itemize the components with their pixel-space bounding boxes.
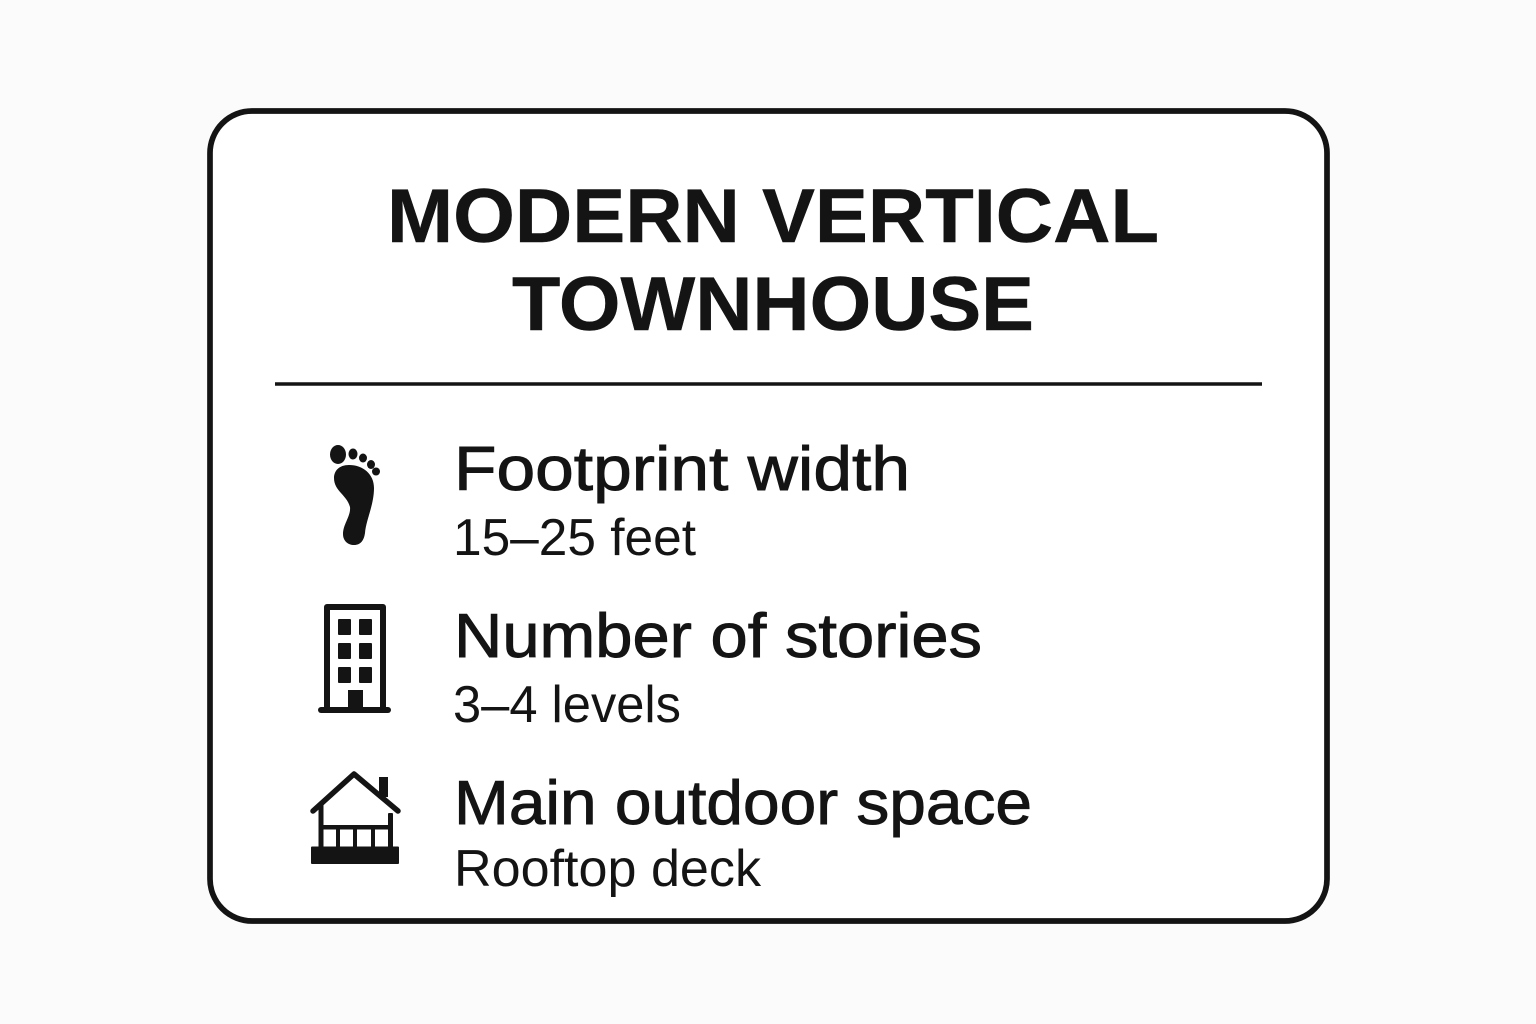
icon: footprint [330,445,380,545]
icon: house with rooftop deck [311,774,399,864]
label: main outdoor space: Main outdoor space [454,769,1032,838]
label: number of stories: Number of stories [454,602,982,671]
row: number of stories [318,602,982,734]
row: footprint width [330,435,910,567]
icon: apartment building [318,607,391,713]
value: 15–25 feet: 15–25 feet [453,509,697,567]
title: TOWNHOUSE [512,262,1034,347]
title [387,174,1159,347]
label: footprint width: Footprint width [454,435,910,504]
title: MODERN VERTICAL [387,174,1159,259]
value: 3–4 levels: 3–4 levels [453,676,681,734]
row: main outdoor space [311,769,1032,898]
value: rooftop deck: Rooftop deck [454,840,762,898]
panel: spec card [210,111,1327,921]
